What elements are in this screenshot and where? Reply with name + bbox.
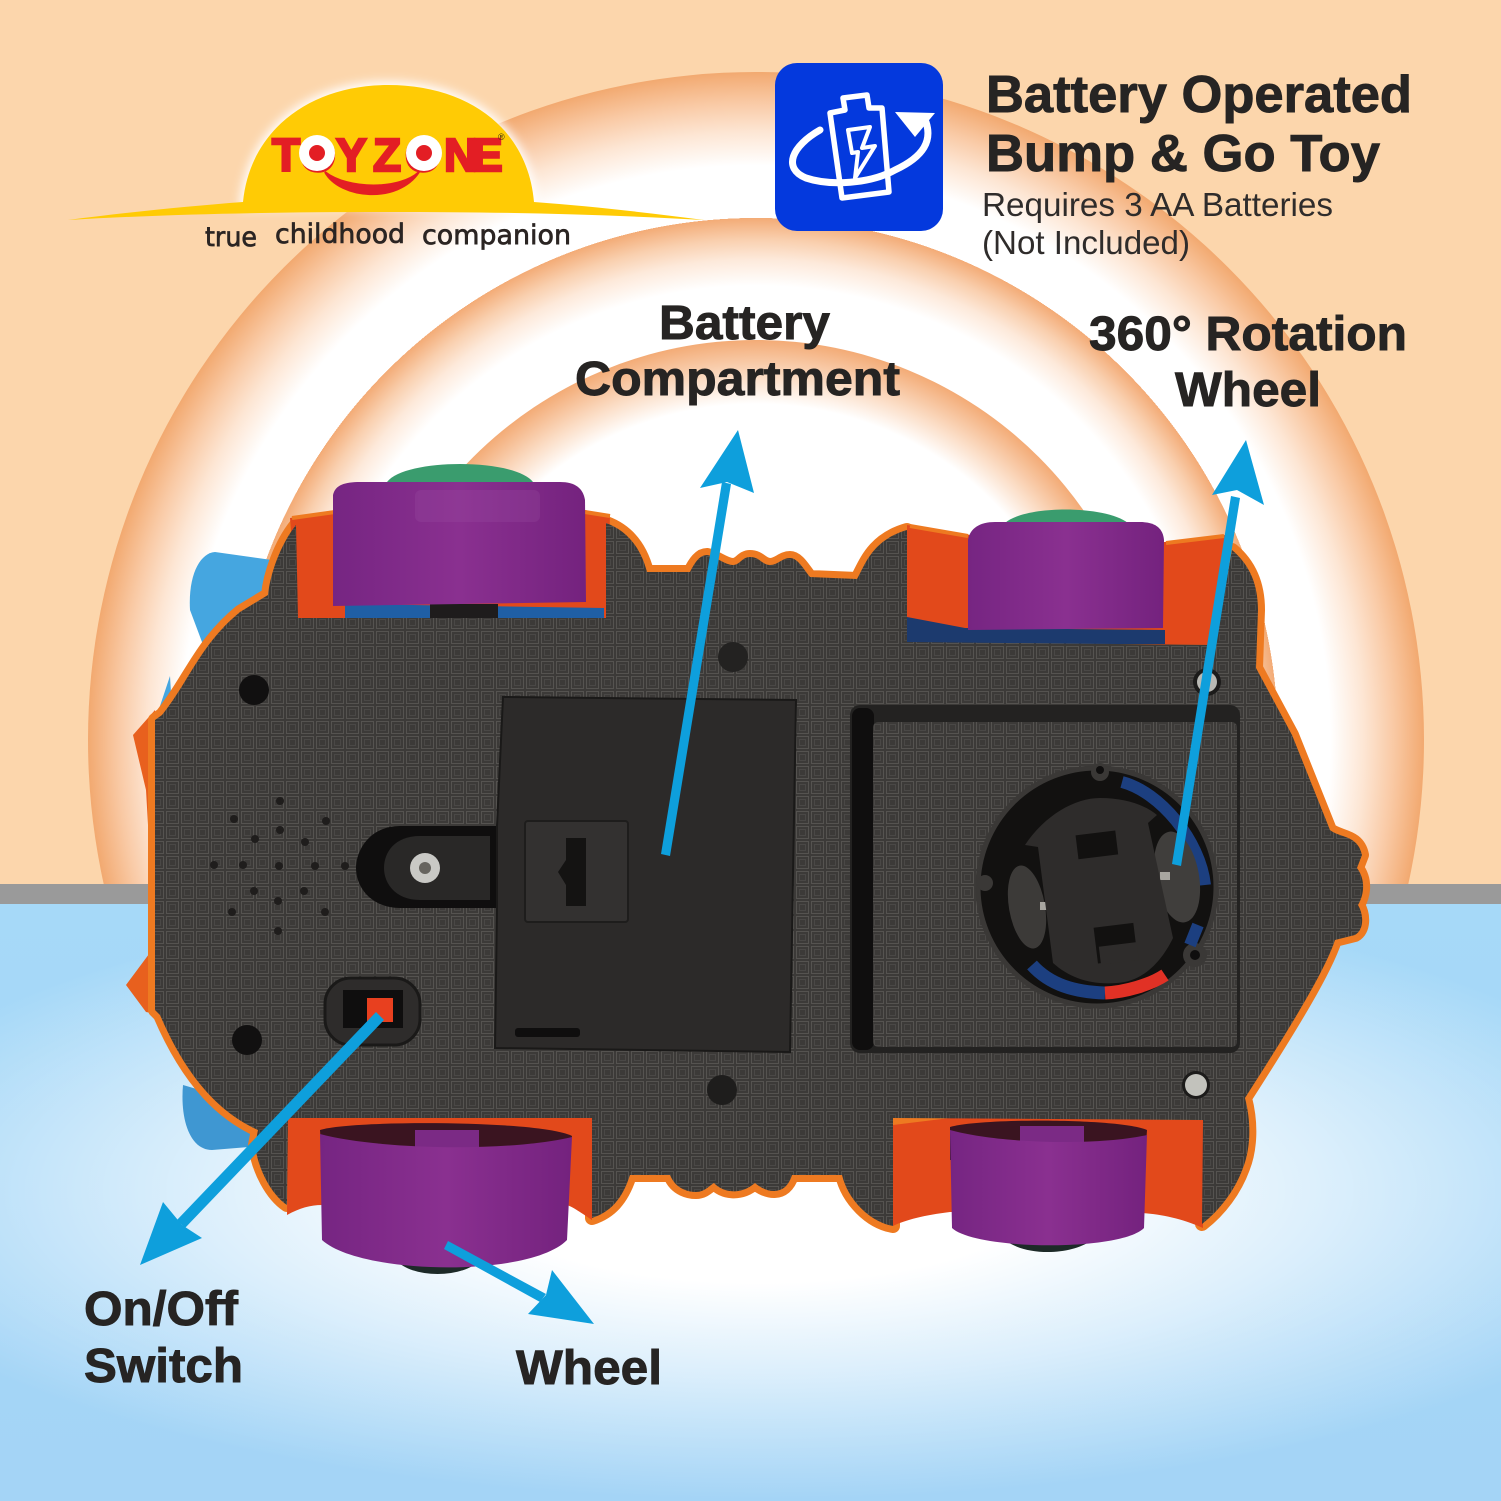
wheel: top left: [333, 464, 586, 606]
icon: battery outline: [830, 95, 889, 198]
label: 360 rotation wheel: [1089, 308, 1407, 417]
logo: Toyzone: [68, 85, 704, 253]
screw slot: [356, 826, 500, 908]
toy: underside of the car: [126, 464, 1363, 1274]
label: on/off switch: [84, 1283, 243, 1393]
red slider: [367, 998, 393, 1022]
on/off switch: [325, 978, 420, 1045]
wheel: top right: [968, 510, 1164, 630]
red-orange wheel wells: [287, 510, 1225, 1228]
rotation wheel housing: [850, 705, 1240, 1053]
switch slot: [343, 990, 403, 1028]
label: wheel: Wheel: [516, 1342, 662, 1395]
speaker holes: [210, 797, 349, 935]
label: battery compartment: [575, 297, 900, 406]
mounting holes and screws: [232, 642, 1221, 1105]
logo: tagline: childhood: [275, 219, 405, 250]
blue gears in wheel wells: [345, 604, 1165, 644]
logo: tagline: true: [205, 222, 257, 253]
heading: product title: [986, 66, 1412, 183]
wheel carrier plate: [1025, 798, 1173, 983]
battery cover latch: [525, 821, 628, 922]
label: battery compartment: Battery: [659, 297, 830, 350]
logo: left eye: [299, 135, 335, 171]
logo: tagline: [205, 219, 571, 253]
housing left shadow: [852, 708, 874, 1050]
label: 360 rotation wheel: 360° Rotation: [1089, 308, 1407, 361]
orange left flap: [126, 710, 162, 1015]
carrier slots: [1076, 831, 1139, 965]
label: battery compartment: Compartment: [575, 353, 900, 406]
wheel: bottom left: [320, 1123, 572, 1274]
logo: smile: [325, 172, 419, 194]
text block: battery note: (Not Included): [982, 224, 1190, 261]
heading: product title: Bump & Go Toy: [986, 125, 1380, 183]
logo: registered mark: ®: [498, 132, 505, 142]
heading: product title: Battery Operated: [986, 66, 1412, 124]
logo: right eye: [406, 135, 442, 171]
red and blue wires: [1032, 965, 1165, 993]
background: grey skirting strip: [0, 884, 1501, 904]
logo: yellow sun hat: [68, 85, 704, 220]
latch slot: [558, 838, 586, 906]
textured black base plate: [155, 523, 1363, 1226]
logo: tagline: companion: [422, 220, 571, 251]
arrow: on/off switch: [140, 1012, 384, 1265]
arrow: wheel: [444, 1241, 594, 1324]
label: 360 rotation wheel: Wheel: [1175, 364, 1321, 417]
orange shell outline: [155, 523, 1363, 1226]
icon: rotation arc: [792, 122, 928, 183]
small black wheel with arrow target: [1147, 828, 1207, 926]
icon: arrowhead: [895, 112, 935, 137]
orange well rims: [292, 512, 1224, 543]
blue rear wheel top: [158, 552, 272, 712]
arrow: 360 rotation wheel: [1172, 440, 1264, 866]
arrow: battery compartment: [661, 430, 754, 856]
label: on/off switch: On/Off: [84, 1283, 239, 1336]
cover notch: [515, 1028, 580, 1037]
housing opening: [978, 768, 1216, 1006]
blue rear wheel bottom: [182, 1085, 262, 1150]
logo: wordmark: TOYZONE: [272, 129, 503, 181]
ring tabs: [977, 763, 1207, 967]
background: peach wall with concentric arcs: [88, 72, 1424, 884]
small black side wheel: [1002, 863, 1052, 951]
battery compartment cover: [495, 697, 796, 1052]
label: on/off switch: Switch: [84, 1340, 243, 1393]
text block: battery note: [982, 186, 1333, 261]
background: blue floor with white glow: [0, 904, 1501, 1501]
text block: battery note: Requires 3 AA Batteries: [982, 186, 1333, 223]
wheel: bottom right: [950, 1121, 1147, 1252]
blue gear ring: [1122, 782, 1205, 945]
housing top face: [873, 722, 1237, 1047]
icon: battery with rotation arrow: [775, 63, 943, 231]
